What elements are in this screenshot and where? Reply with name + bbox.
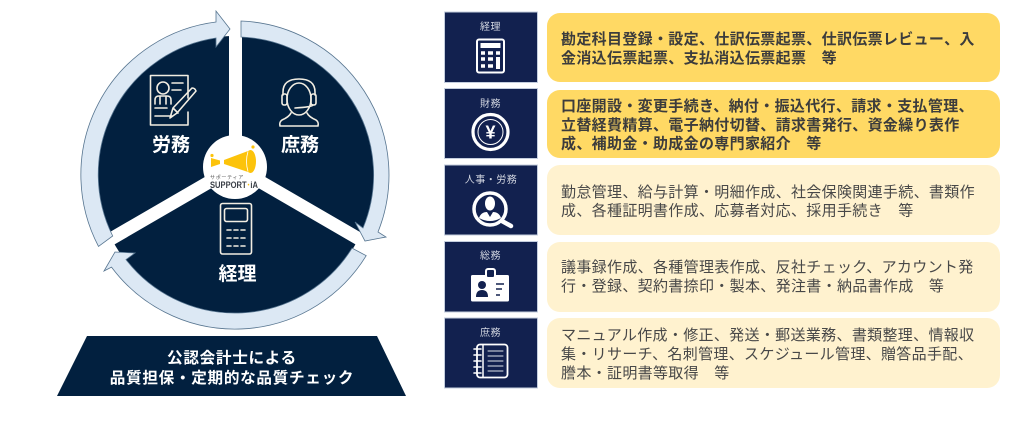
arrow: lower left to top <box>81 11 230 246</box>
icon: labour document <box>150 76 196 125</box>
side panel: accounting <box>444 12 538 82</box>
text: finance tasks: 口座開設・変更手続き、納付・振込代行、請求・支払管理、 <box>561 97 974 115</box>
side panel: administration <box>444 318 538 388</box>
text panel: administration tasks <box>547 318 1000 388</box>
text panel: finance tasks <box>547 90 1000 158</box>
logo name: SUPPORT･iA <box>210 180 258 190</box>
text: administration tasks: 集・リサーチ、名刺管理、スケジュール管理、贈答品手配、 <box>561 345 973 363</box>
text panel: HR tasks <box>547 165 1000 235</box>
logo hub <box>203 135 267 199</box>
heading: general affairs: 総務 <box>480 249 501 262</box>
text panel: general affairs tasks <box>547 242 1000 312</box>
heading: accounting: 経理 <box>480 20 501 33</box>
icon: yen coin <box>473 114 508 150</box>
text: accounting tasks: 金消込伝票起票、支払消込伝票起票 等 <box>561 49 837 67</box>
label: accounting: 経理 <box>218 263 257 285</box>
cycle diagram <box>81 10 389 329</box>
icon: yen coin: ¥ <box>485 122 496 142</box>
side panel: finance <box>444 88 538 158</box>
icon: calculator handset <box>220 204 252 254</box>
text: HR tasks: 成、各種証明書作成、応募者対応、採用手続き 等 <box>561 202 914 220</box>
icon: calculator <box>477 40 504 72</box>
row: HR and labour <box>444 165 1000 235</box>
side panel: HR and labour <box>444 165 538 235</box>
arrow: top to lower right <box>241 21 389 241</box>
text: finance tasks: 立替経費精算、電子納付切替、請求書発行、資金繰り表作 <box>561 116 960 134</box>
banner: CPA quality check: 品質担保・定期的な品質チェック <box>110 369 354 387</box>
icon: headset operator <box>280 79 318 126</box>
row: finance <box>444 88 1000 158</box>
text: general affairs tasks: 議事録作成、各種管理表作成、反社チェック、アカウント発 <box>561 258 974 276</box>
text: administration tasks: マニュアル作成・修正、発送・郵送業務、書類整理、情報収 <box>561 327 974 344</box>
row: general affairs <box>444 242 1000 312</box>
text: general affairs tasks: 行・登録、契約書捺印・製本、発注書・納品書作成 等 <box>561 277 944 295</box>
heading: finance: 財務 <box>480 97 501 110</box>
icon: magnifier with person <box>474 193 511 226</box>
text: finance tasks: 成、補助金・助成金の専門家紹介 等 <box>561 134 822 152</box>
text panel: accounting tasks <box>547 13 1000 82</box>
icon: notebook <box>474 344 508 378</box>
label: labour: 労務 <box>152 134 190 156</box>
text: HR tasks: 勤怠管理、給与計算・明細作成、社会保険関連手続、書類作 <box>561 183 975 201</box>
label: general affairs: 庶務 <box>281 134 319 156</box>
heading: HR and labour: 人事・労務 <box>465 173 517 186</box>
side panel: general affairs <box>444 242 538 312</box>
logo small text: サポーティア <box>210 174 244 181</box>
banner: CPA quality check: 公認会計士による <box>167 349 297 367</box>
icon: ID card <box>471 269 509 302</box>
heading: administration: 庶務 <box>480 326 501 339</box>
dark circle divided into three sectors <box>85 10 385 314</box>
text: administration tasks: 謄本・証明書等取得 等 <box>561 364 730 382</box>
banner: CPA quality check <box>57 336 406 396</box>
icon: megaphone <box>210 145 256 173</box>
row: accounting <box>444 12 1000 82</box>
arrow: lower right to lower left <box>104 248 366 329</box>
row: administration <box>444 318 1000 388</box>
text: accounting tasks: 勘定科目登録・設定、仕訳伝票起票、仕訳伝票レビュー、入 <box>561 30 975 48</box>
